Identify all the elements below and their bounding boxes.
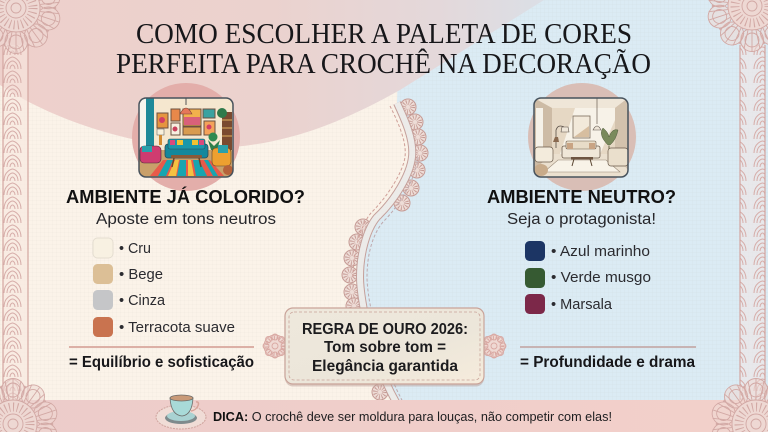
callout: golden rule: Tom sobre tom =	[324, 339, 446, 356]
pink top arc	[0, 0, 544, 148]
callout: golden rule: REGRA DE OURO 2026:	[302, 321, 468, 338]
title	[116, 18, 651, 80]
swatch list: deep tones	[525, 241, 651, 314]
swatch list: deep tones: • Marsala	[551, 297, 613, 313]
background: cream left side	[0, 0, 412, 402]
subheading: colorful room: Aposte em tons neutros	[96, 211, 276, 228]
corner doily top-left	[0, 0, 72, 62]
heading: neutral room: AMBIENTE NEUTRO?	[487, 187, 676, 207]
subheading: neutral room: Seja o protagonista!	[507, 211, 656, 228]
heading: colorful room: AMBIENTE JÁ COLORIDO?	[66, 186, 305, 207]
icon: neutral living room	[528, 83, 636, 191]
corner doily bottom-right	[696, 372, 768, 432]
swatch list: deep tones: • Azul marinho	[551, 244, 650, 260]
panel: colorful room	[66, 83, 305, 371]
callout: golden rule	[263, 308, 506, 386]
panel: neutral room	[487, 83, 696, 371]
crochet divider between the sides	[342, 99, 428, 402]
swatch list: neutral tones: • Cru	[119, 241, 151, 257]
corner doily top-right	[696, 0, 768, 62]
swatch list: deep tones: • Verde musgo	[551, 270, 651, 286]
corner doily bottom-left	[0, 372, 72, 432]
bottom tip band background	[0, 400, 768, 432]
swatch list: neutral tones	[93, 238, 235, 337]
callout: golden rule: Elegância garantida	[312, 358, 458, 375]
title: COMO ESCOLHER A PALETA DE CORES	[136, 18, 632, 50]
title: PERFEITA PARA CROCHÊ NA DECORAÇÃO	[116, 47, 651, 80]
swatch list: neutral tones: • Terracota suave	[119, 320, 235, 336]
result: depth: = Profundidade e drama	[520, 354, 695, 371]
swatch list: neutral tones: • Bege	[119, 267, 163, 283]
tip text: DICA: O crochê deve ser moldura para louças, não competir com elas!	[213, 410, 612, 424]
icon: colorful living room	[132, 83, 240, 191]
swatch list: neutral tones: • Cinza	[119, 293, 166, 309]
icon: teacup on doily	[156, 395, 206, 429]
result: balance: = Equilíbrio e sofisticação	[69, 354, 254, 371]
lace border left	[3, 45, 28, 400]
lace border right	[740, 45, 765, 400]
